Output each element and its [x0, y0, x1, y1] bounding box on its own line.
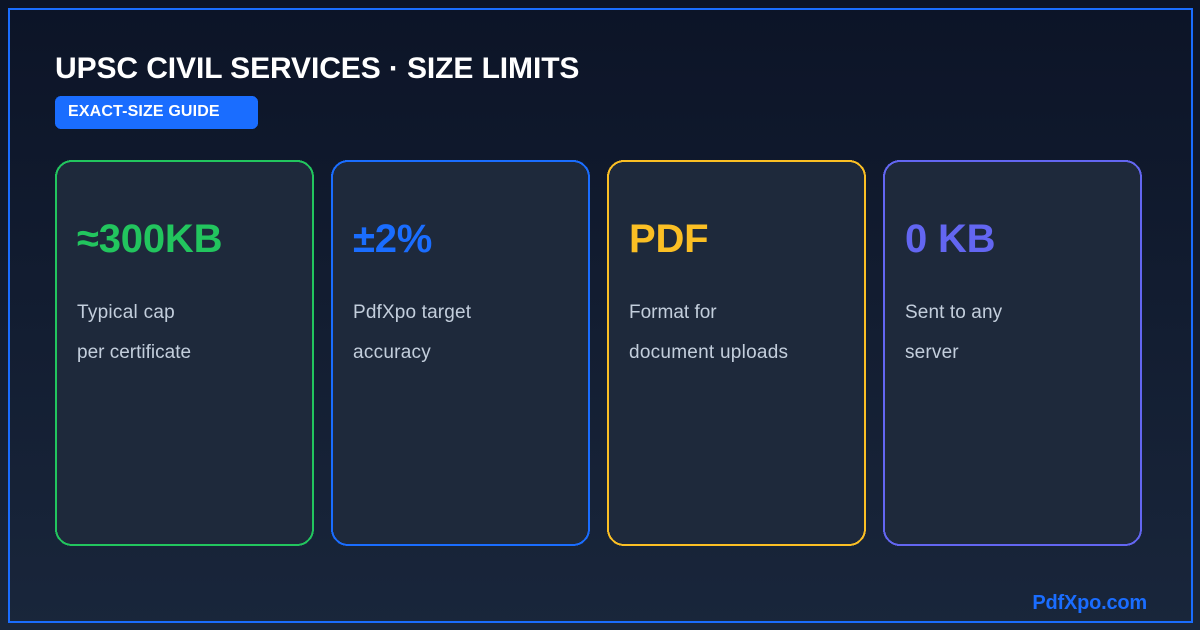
- title: UPSC CIVIL SERVICES · SIZE LIMITS: [55, 52, 579, 85]
- panel: server uploads: server: [905, 342, 959, 363]
- panel: format: Format for: [629, 302, 717, 323]
- panel: server uploads: Sent to any: [905, 302, 1002, 323]
- panel: typical cap: [55, 160, 314, 546]
- brand footer: PdfXpo.com: [1032, 592, 1147, 614]
- panel: typical cap: Typical cap: [77, 302, 175, 323]
- panel: server uploads: [883, 160, 1142, 546]
- panel: target accuracy: [331, 160, 590, 546]
- panel: format: [607, 160, 866, 546]
- badge: EXACT-SIZE GUIDE: [68, 103, 220, 120]
- panel: typical cap: ≈300KB: [77, 217, 222, 261]
- panel: target accuracy: PdfXpo target: [353, 302, 471, 323]
- panel: target accuracy: ±2%: [353, 217, 432, 261]
- panel: format: document uploads: [629, 342, 788, 363]
- badge: [55, 96, 258, 129]
- panel: typical cap: per certificate: [77, 342, 191, 363]
- panel: target accuracy: accuracy: [353, 342, 431, 363]
- panel: server uploads: 0 KB: [905, 217, 995, 261]
- panel: format: PDF: [629, 217, 708, 261]
